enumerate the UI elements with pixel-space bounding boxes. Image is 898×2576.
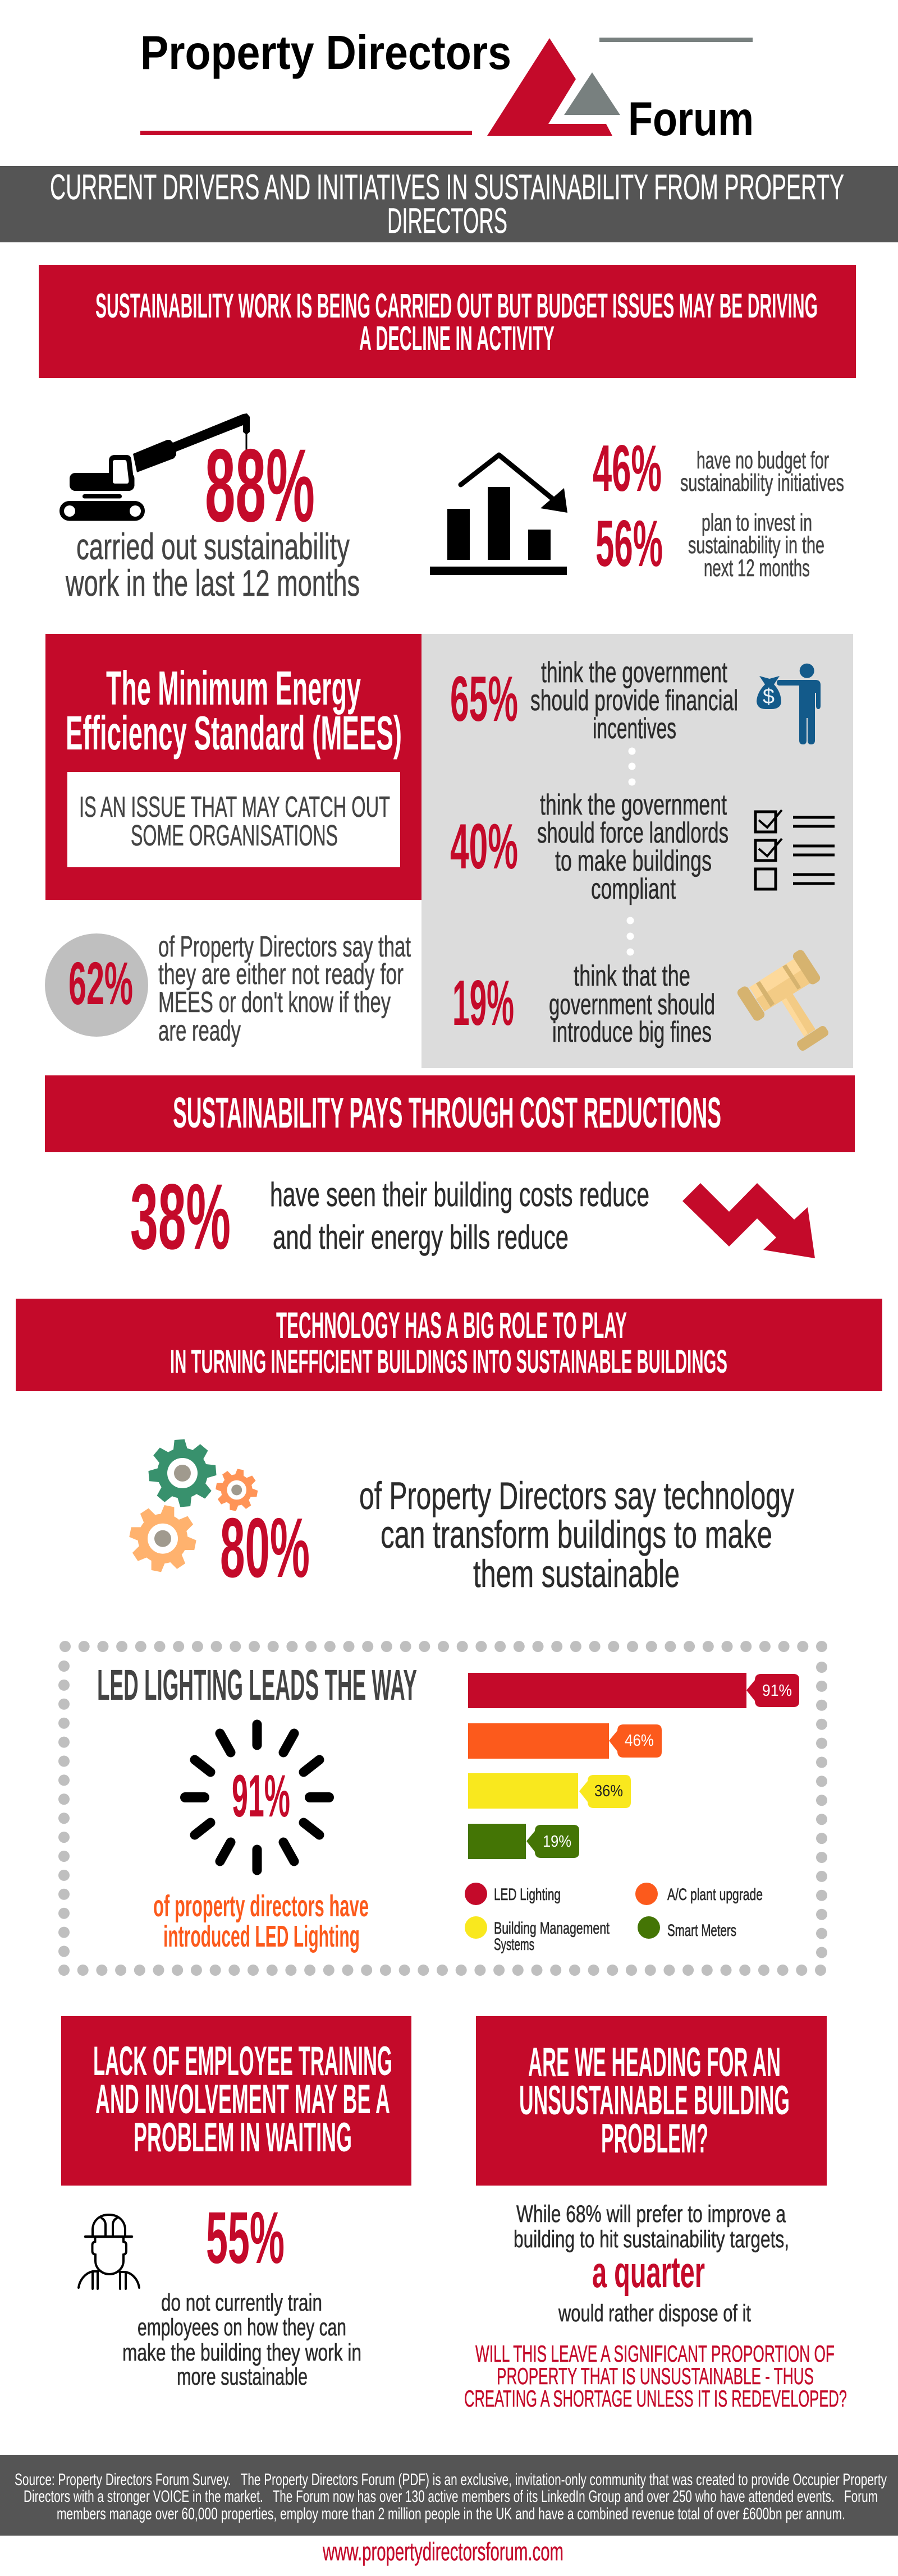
stat: 40% force landlords: should force landlords [537,817,729,849]
bar: A/C plant upgrade 46% [468,1723,662,1759]
stat circle: 62% [45,933,148,1037]
stat: 40% force landlords: compliant [591,873,676,905]
panel: MEES heading [45,634,421,900]
stat: 46% have no budget: have no budget for [697,447,829,474]
section heading: technology role [16,1299,882,1391]
title banner: DIRECTORS [387,201,507,241]
bar: Building Management Systems 36% [468,1773,631,1809]
stat: 80% technology [220,1474,794,1595]
stat: 55% do not train: more sustainable [177,2363,308,2390]
text block: 62% explanation: of Property Directors say that [158,931,411,963]
stat: 65% financial incentives: incentives [593,712,676,745]
stat: 56% plan to invest: sustainability in the [688,532,824,559]
icon: person holding money bag: $ [763,685,775,709]
footer: website: www.propertydirectorsforum.com [322,2537,563,2566]
stat: 55% do not train: make the building they work in [122,2339,361,2366]
chart legend: Systems [494,1935,534,1954]
icon: excavator [59,413,250,521]
stat: 46% have no budget [593,431,844,505]
stat: 80% technology: them sustainable [473,1552,680,1595]
stat: 38% cost reduction [130,1165,649,1269]
footer: source note [0,2455,898,2536]
icon: gears [123,1437,261,1577]
divider dots: first [629,747,635,785]
section heading: budget issues: A DECLINE IN ACTIVITY [359,319,555,357]
divider dots: second [626,917,634,956]
bar: Building Management Systems 36%: 36% [594,1782,623,1800]
text block: 62% explanation: MEES or don't know if they [158,986,391,1019]
panel: MEES heading: Efficiency Standard (MEES) [66,707,402,760]
chart legend: LED Lighting [494,1885,561,1904]
stat: 88% carried out sustainability work [65,428,360,604]
stat circle: 62%: 62% [68,949,133,1017]
stat: 55% do not train: do not currently train [161,2289,322,2316]
text block: a quarter would dispose: building to hit sustainability targets, [514,2226,789,2253]
section heading: cost reductions [45,1075,855,1152]
stat: 65% financial incentives: should provide financial [530,684,738,717]
chart legend [465,1883,763,1954]
bar: Smart Meters 19% [468,1824,579,1859]
icon: light burst with 91% [185,1724,329,1870]
stat: 19% big fines: 19% [452,968,514,1039]
bar: A/C plant upgrade 46%: 46% [625,1732,654,1750]
panel: government actions background [421,634,853,1068]
stat: 88% carried out sustainability work: 88% [205,428,315,544]
panel: LED lighting dotted frame [64,1646,822,1970]
panel heading: unsustainable building problem: PROBLEM? [601,2116,708,2161]
logo wordmark: Property Directors [140,26,511,80]
text block: shortage question [464,2340,847,2412]
stat: 56% plan to invest [595,507,824,582]
stat: 80% technology: 80% [220,1500,310,1595]
text block: a quarter would dispose: would rather dispose of it [558,2300,751,2327]
callout: issue that may catch out: SOME ORGANISATIONS [131,820,338,852]
text block: property directors introduced LED: of property directors have [153,1889,369,1923]
stat: 55% do not train: 55% [206,2196,285,2279]
stat: 19% big fines [452,960,715,1048]
panel heading: employee training: PROBLEM IN WAITING [134,2115,352,2160]
bar: Smart Meters 19%: 19% [543,1833,571,1851]
stat: 38% cost reduction: 38% [130,1165,231,1269]
stat: 65% financial incentives [450,656,738,745]
arrow: zigzag downward [682,1183,815,1258]
stat: 56% plan to invest: plan to invest in [702,509,812,536]
callout: issue that may catch out: IS AN ISSUE THAT MAY CATCH OUT [79,791,390,824]
stat: 40% force landlords: think the government [540,789,727,821]
logo word Forum: Forum [628,93,754,146]
panel heading: employee training: AND INVOLVEMENT MAY BE A [95,2077,390,2122]
panel: MEES heading: The Minimum Energy [106,662,361,715]
stat: 19% big fines: introduce big fines [552,1016,712,1048]
stat: 55% do not train: employees on how they can [138,2314,346,2341]
callout: issue that may catch out [67,772,400,867]
text block: 62% explanation: they are either not ready for [158,958,404,991]
text block: property directors introduced LED [153,1889,369,1953]
title banner [0,166,898,242]
stat: 40% force landlords [450,789,729,905]
section heading: budget issues [39,265,856,378]
bar: LED lighting 91%: 91% [762,1682,792,1700]
icon: light burst with 91%: 91% [232,1762,290,1829]
chart legend: Building Management [494,1919,610,1938]
text block: a quarter would dispose: a quarter [592,2247,705,2297]
chart legend: A/C plant upgrade [667,1885,763,1904]
icon: person holding money bag [757,664,821,744]
stat: 56% plan to invest: next 12 months [704,555,810,582]
text block: property directors introduced LED: introduced LED Lighting [163,1920,360,1953]
bar: LED lighting 91% [468,1673,799,1708]
icon: checklist [755,810,835,889]
text block: a quarter would dispose [514,2201,789,2327]
logo red triangle [487,38,612,136]
icon: worker with hard hat [79,2215,139,2289]
stat: 56% plan to invest: 56% [595,507,663,580]
stat: 40% force landlords: to make buildings [555,845,712,877]
stat: 38% cost reduction: have seen their building costs reduce [270,1176,649,1213]
stat: 46% have no budget: 46% [593,431,662,505]
stat: 19% big fines: government should [549,988,715,1021]
panel heading: employee training [61,2016,411,2186]
text block: 62% explanation [158,931,411,1047]
panel heading: employee training: LACK OF EMPLOYEE TRAINING [93,2039,392,2084]
stat: 38% cost reduction: and their energy bills reduce [273,1218,569,1256]
icon: gavel [736,948,830,1052]
stat: 19% big fines: think that the [574,960,690,992]
logo grey triangle [564,72,620,115]
stat: 65% financial incentives: think the government [541,656,727,689]
text: LED LIGHTING LEADS THE WAY [97,1661,417,1709]
text block: a quarter would dispose: While 68% will prefer to improve a [516,2201,786,2228]
panel heading: unsustainable building problem [476,2016,827,2186]
stat: 88% carried out sustainability work: work in the last 12 months [65,562,360,604]
logo: Property Directors Forum [140,26,754,146]
stat: 55% do not train [122,2196,361,2390]
text block: 62% explanation: are ready [158,1015,241,1047]
chart legend: Smart Meters [667,1921,736,1940]
stat: 88% carried out sustainability work: carried out sustainability [76,526,350,567]
stat: 65% financial incentives: 65% [450,664,518,735]
stat: 40% force landlords: 40% [450,811,518,882]
bar chart [468,1673,799,1859]
icon: bar chart with falling arrow [430,455,567,575]
